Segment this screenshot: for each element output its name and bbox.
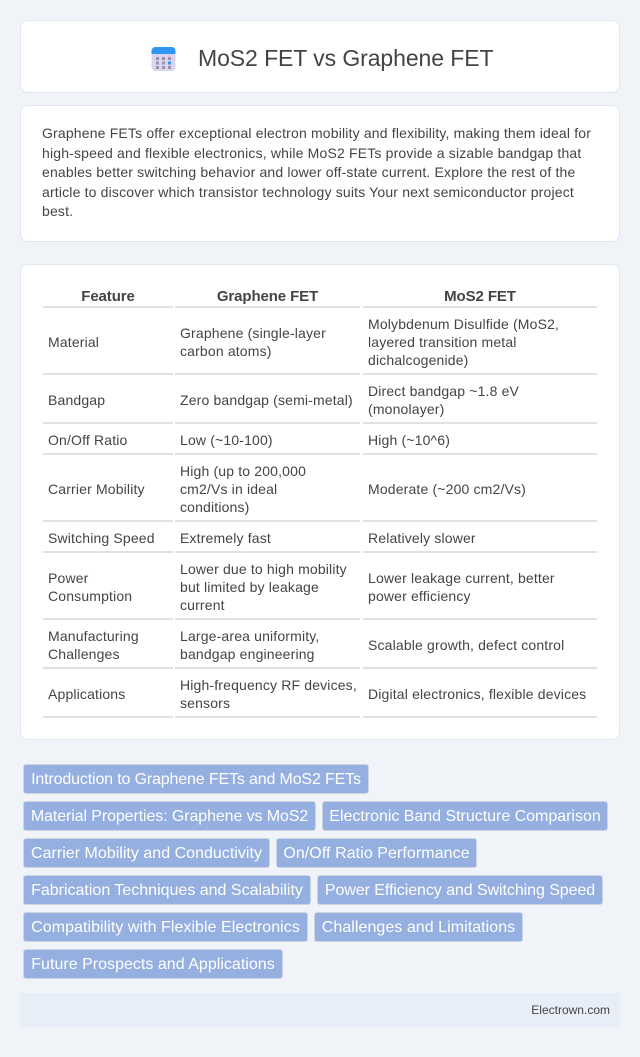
row: carrier mobility: cm2/Vs in ideal	[180, 480, 277, 496]
row: manufacturing challenges: Challenges	[48, 646, 120, 662]
row: manufacturing challenges: Scalable growth, defect control	[368, 636, 564, 652]
row: carrier mobility	[43, 462, 597, 522]
row: applications: sensors	[180, 694, 230, 710]
row: on/off ratio: On/Off Ratio	[48, 432, 127, 448]
footer source: Electrown.com	[531, 1003, 610, 1017]
intro paragraph: best.	[42, 203, 73, 219]
tag: Carrier Mobility and Conductivity	[31, 845, 262, 862]
intro text panel	[20, 105, 620, 242]
row: power consumption	[43, 560, 597, 620]
tag	[23, 949, 283, 979]
tag	[23, 801, 316, 831]
comparison table	[43, 288, 597, 718]
row: on/off ratio: High (~10^6)	[368, 432, 450, 448]
row: carrier mobility: High (up to 200,000	[180, 462, 306, 478]
tag	[322, 801, 608, 831]
row: on/off ratio	[43, 432, 597, 455]
footer bar	[20, 993, 620, 1027]
row: applications	[43, 676, 597, 718]
row: bandgap: (monolayer)	[368, 400, 444, 416]
table header row	[43, 288, 597, 308]
row: switching speed	[43, 530, 597, 553]
intro paragraph: enables better switching behavior and lower off-state current. Explore the rest of the	[42, 164, 575, 180]
row: power consumption: Power	[48, 570, 88, 586]
tag	[23, 912, 308, 942]
tag: On/Off Ratio Performance	[283, 845, 470, 862]
row: manufacturing challenges: bandgap engineering	[180, 646, 315, 662]
tag: Power Efficiency and Switching Speed	[325, 882, 595, 899]
intro paragraph: Graphene FETs offer exceptional electron mobility and flexibility, making them ideal for	[42, 125, 591, 141]
row: power consumption: Lower due to high mobility	[180, 560, 347, 576]
row: power consumption: current	[180, 596, 225, 612]
row: manufacturing challenges: Manufacturing	[48, 628, 139, 644]
row: material: Molybdenum Disulfide (MoS2,	[368, 316, 559, 332]
row: bandgap: Bandgap	[48, 392, 105, 408]
row: switching speed: Switching Speed	[48, 530, 155, 546]
row: material: carbon atoms)	[180, 342, 272, 358]
tag: Future Prospects and Applications	[31, 956, 275, 973]
tag	[314, 912, 523, 942]
tag: Electronic Band Structure Comparison	[329, 808, 601, 825]
row: power consumption: Consumption	[48, 588, 132, 604]
row: manufacturing challenges: Large-area uniformity,	[180, 628, 319, 644]
row: bandgap	[43, 382, 597, 424]
row: applications: Digital electronics, flexible devices	[368, 686, 586, 702]
row: power consumption: Lower leakage current, better	[368, 570, 555, 586]
row: switching speed: Extremely fast	[180, 530, 271, 546]
tag	[317, 875, 603, 905]
table header row: MoS2 FET	[444, 288, 516, 305]
row: material: dichalcogenide)	[368, 352, 468, 368]
row: switching speed: Relatively slower	[368, 530, 476, 546]
row: bandgap: Direct bandgap ~1.8 eV	[368, 382, 519, 398]
icon: calendar	[152, 47, 176, 71]
tag: Challenges and Limitations	[322, 919, 515, 936]
topic tags	[23, 764, 608, 979]
tag: Material Properties: Graphene vs MoS2	[31, 808, 308, 825]
table header row: Graphene FET	[217, 288, 318, 305]
row: carrier mobility: conditions)	[180, 498, 249, 514]
row: material: layered transition metal	[368, 334, 517, 350]
title: MoS2 FET vs Graphene FET	[198, 45, 494, 71]
row: applications: Applications	[48, 686, 125, 702]
tag	[23, 838, 270, 868]
tag: Fabrication Techniques and Scalability	[31, 882, 303, 899]
tag	[23, 764, 369, 794]
intro paragraph	[42, 125, 591, 219]
table header row: Feature	[81, 288, 135, 305]
tag	[276, 838, 477, 868]
tag: Compatibility with Flexible Electronics	[31, 919, 300, 936]
comparison table panel	[20, 264, 620, 740]
row: material	[43, 316, 597, 375]
row: bandgap: Zero bandgap (semi-metal)	[180, 392, 353, 408]
row: power consumption: power efficiency	[368, 588, 471, 604]
row: manufacturing challenges	[43, 628, 597, 669]
row: material: Graphene (single-layer	[180, 324, 326, 340]
tag: Introduction to Graphene FETs and MoS2 FETs	[31, 771, 361, 788]
row: power consumption: but limited by leakage	[180, 578, 319, 594]
row: carrier mobility: Moderate (~200 cm2/Vs)	[368, 480, 526, 496]
row: on/off ratio: Low (~10-100)	[180, 432, 273, 448]
row: carrier mobility: Carrier Mobility	[48, 480, 145, 496]
row: applications: High-frequency RF devices,	[180, 676, 357, 692]
intro paragraph: article to discover which transistor technology suits Your next semiconductor project	[42, 184, 574, 200]
row: material: Material	[48, 334, 99, 350]
tag	[23, 875, 311, 905]
intro paragraph: high-speed and flexible electronics, while MoS2 FETs provide a sizable bandgap that	[42, 144, 581, 160]
header card	[20, 20, 620, 93]
